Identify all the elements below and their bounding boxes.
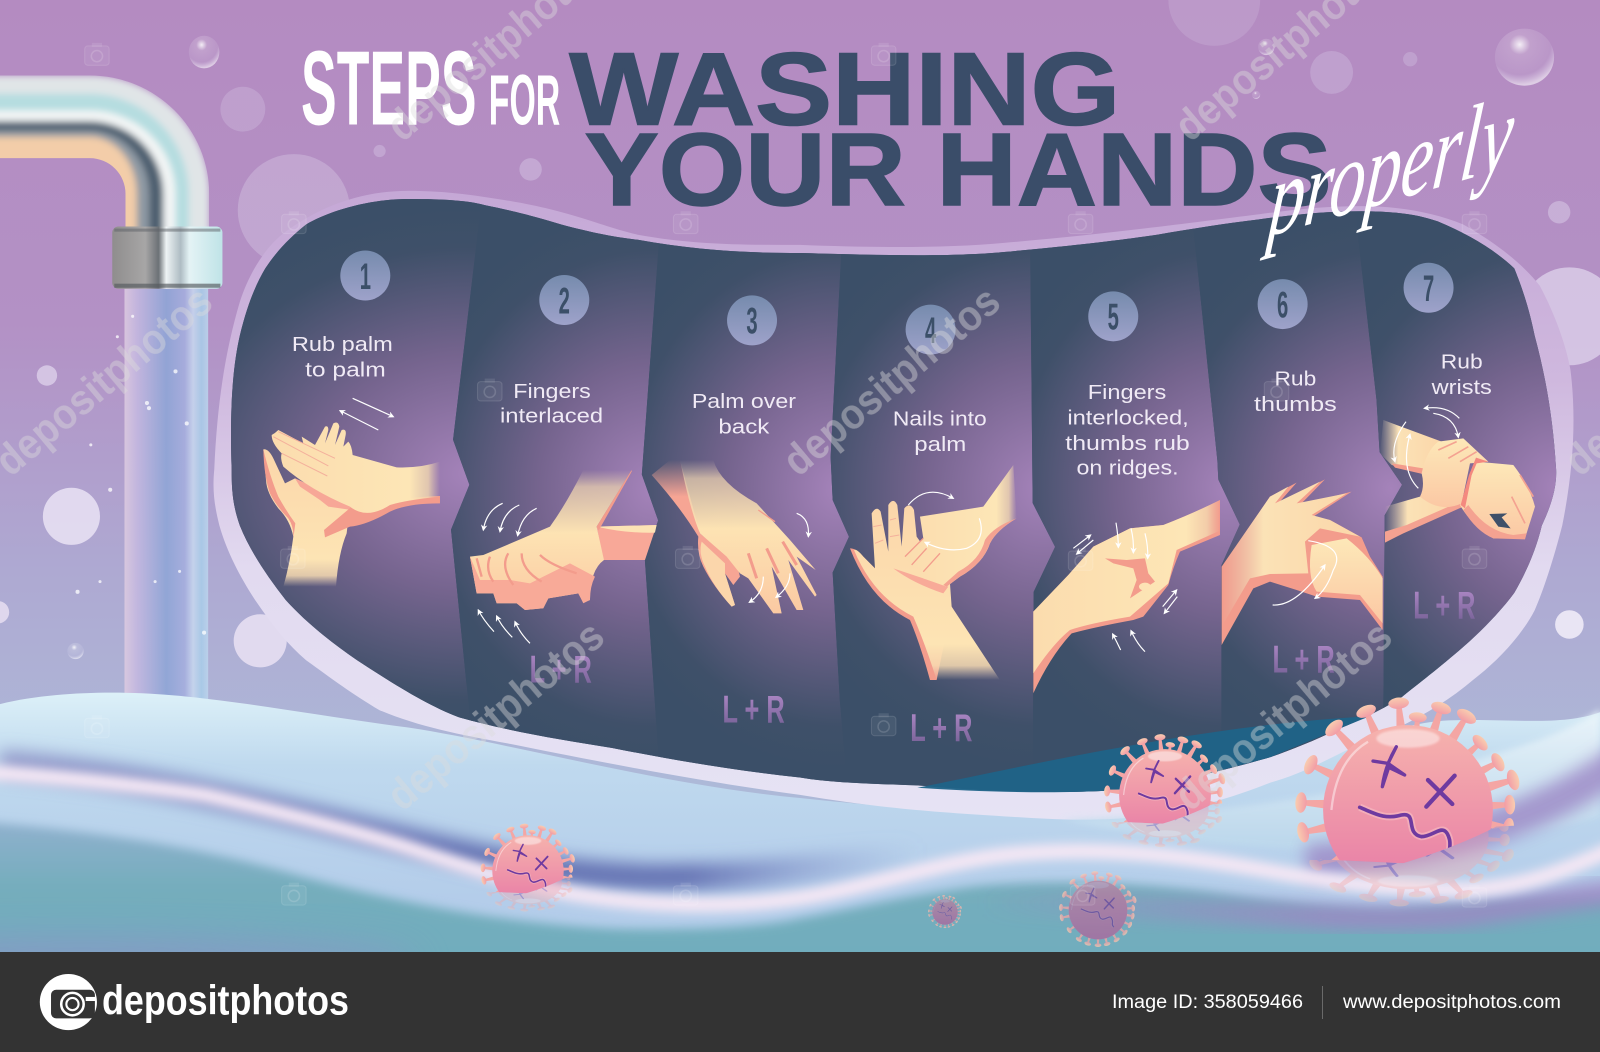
step 4 number: 4 [925, 311, 937, 352]
L+R step 2: L + R [530, 649, 592, 692]
step 6 number [1258, 279, 1308, 329]
title: washing your hands [569, 31, 1332, 227]
caption 5: on ridges. [1077, 457, 1179, 479]
title: washing your hands: WASHING [569, 31, 1120, 146]
background soap circles [0, 0, 1600, 667]
step 1 number: 1 [360, 257, 371, 297]
caption 1 [292, 334, 393, 382]
panel column 7 [1355, 211, 1556, 708]
panel column 6 [1194, 211, 1402, 770]
footer image id: Image ID: 358059466 [1112, 992, 1303, 1013]
arrows [1073, 523, 1177, 652]
footer url: www.depositphotos.com [1342, 992, 1561, 1013]
step 3 number [727, 295, 777, 345]
stock watermark text: depositphotos [1165, 611, 1401, 820]
step 7 number: 7 [1423, 269, 1434, 310]
virus: large [1295, 697, 1522, 917]
step 1 number [340, 251, 390, 301]
arrows [340, 398, 393, 430]
hand 5: fingers interlocked [1033, 500, 1220, 693]
water ribbons [0, 760, 1600, 991]
caption 1: Rub palm [292, 334, 393, 356]
L+R step 3: L + R [722, 688, 785, 731]
footer logo: depositphotos [102, 976, 349, 1023]
title: washing your hands: YOUR HANDS [585, 112, 1332, 227]
step 6 number: 6 [1277, 285, 1288, 326]
arrows [1394, 408, 1459, 488]
L+R step 6: L + R [1272, 638, 1335, 681]
arrows [478, 503, 537, 643]
caption 3 [692, 391, 796, 439]
virus: submerged [1059, 871, 1137, 947]
faucet [0, 76, 222, 289]
caption 3: Palm over [692, 391, 796, 413]
water body [0, 693, 1600, 952]
step captions [292, 334, 1492, 479]
footer logo [40, 974, 349, 1030]
hand 7: rub wrists [1380, 408, 1535, 543]
caption 2: interlaced [500, 405, 603, 427]
title: properly: properly [1259, 72, 1520, 262]
panel column 1 [231, 199, 482, 721]
caption 2 [500, 381, 603, 427]
stock watermark camera icons [85, 43, 1487, 907]
stock watermark text: depositphotos [774, 277, 1009, 485]
dark teal water seen through panel [917, 716, 1369, 792]
virus: medium [1104, 734, 1226, 853]
title: steps for: STEPS [301, 29, 477, 147]
step 7 number [1404, 263, 1454, 313]
caption 7: Rub [1441, 351, 1483, 373]
caption 4: palm [914, 434, 966, 456]
caption 7: wrists [1430, 377, 1492, 399]
footer divider [1322, 986, 1323, 1019]
step 5 number: 5 [1108, 297, 1119, 338]
step 4 number [906, 305, 956, 355]
caption 3: back [718, 417, 770, 439]
lower water teal [0, 821, 1600, 980]
purple-blue wave band [0, 763, 918, 878]
caption 1: to palm [305, 360, 386, 382]
left + right labels [530, 584, 1475, 750]
hand 2: fingers interlaced [470, 470, 657, 643]
panel column 2 [451, 204, 659, 757]
caption 6: thumbs [1254, 394, 1337, 416]
caption 4 [893, 409, 987, 456]
step 2 number [539, 275, 589, 325]
caption 5: Fingers [1088, 382, 1166, 404]
hand illustrations [263, 398, 1535, 693]
L+R step 7: L + R [1413, 584, 1475, 627]
stock watermark text: depositphotos [378, 611, 613, 820]
step 2 number: 2 [559, 281, 570, 322]
virus: tiny [928, 895, 962, 928]
hand 4: nails into palm [850, 465, 1017, 680]
caption 2: Fingers [513, 381, 591, 403]
hand 3: palm over back [652, 460, 817, 613]
caption 5: thumbs rub [1065, 433, 1190, 455]
foreground wave [1061, 709, 1600, 850]
panel column 5 [1030, 184, 1240, 806]
arrows [1273, 541, 1337, 605]
hand 1: rub palm to palm [263, 398, 440, 587]
faucet aerator [112, 227, 222, 289]
bottom left purple corner [0, 938, 418, 991]
panel outer border [214, 191, 1573, 820]
caption 5 [1065, 382, 1190, 479]
pale pink ribbon [0, 772, 1600, 905]
footer bar [0, 952, 1600, 1052]
panel column 4 [830, 250, 1055, 786]
title: FOR [489, 60, 560, 140]
panel: steps [204, 184, 1571, 806]
water stream [76, 289, 208, 707]
step 3 number: 3 [746, 301, 758, 342]
step 5 number [1088, 291, 1138, 341]
bubbles [67, 29, 1554, 926]
caption 7 [1430, 351, 1492, 399]
caption 6: Rub [1274, 369, 1316, 391]
panel column 3 [642, 243, 849, 782]
arrows [908, 492, 981, 550]
L+R step 4: L + R [910, 707, 972, 750]
hand 6: rub thumbs [1222, 479, 1383, 645]
title [301, 29, 1520, 262]
virus: small [480, 823, 576, 916]
step numbers [340, 251, 1454, 355]
stock watermark text [0, 0, 1600, 820]
caption 4: Nails into [893, 409, 987, 431]
caption 6 [1254, 369, 1337, 416]
caption 5: interlocked, [1067, 407, 1189, 429]
arrows [749, 513, 809, 602]
